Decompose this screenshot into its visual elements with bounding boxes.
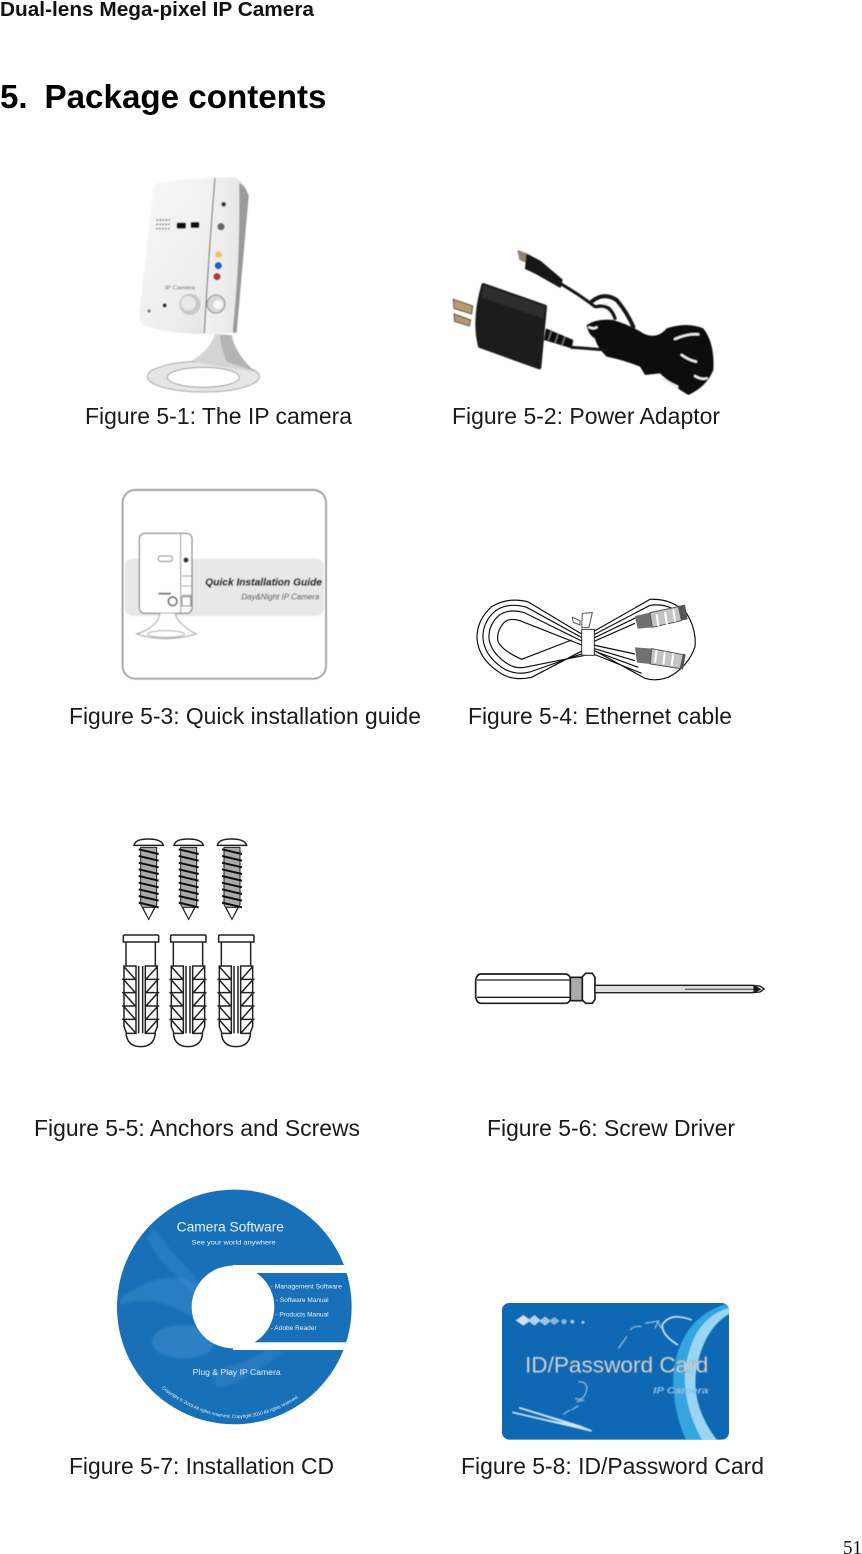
caption: figure 5-5: Figure 5-5: Anchors and Screws [34,1115,360,1141]
section heading: Package contents [44,78,326,115]
caption: figure 5-6: Figure 5-6: Screw Driver [487,1115,735,1141]
section heading: 5. [0,78,28,115]
booklet: quick installation guide: Day&Night IP Camera [241,591,320,601]
installation CD [117,1190,352,1424]
installation CD: - Adobe Reader [271,1325,317,1332]
photo: IP camera [139,177,259,392]
photo: IP camera: IP Camera [165,285,196,291]
booklet: quick installation guide: Quick Installation Guide [205,577,323,588]
installation CD: - Management Software [271,1283,342,1290]
coiled cord [587,320,714,395]
caption: figure 5-8: Figure 5-8: ID/Password Card [461,1453,764,1479]
installation CD: Copyright © 2010 All rights reserved. Copyright 2010 All rights reserved. [162,1386,299,1419]
ID/password card: IP Camera [653,1385,708,1395]
installation CD: Camera Software [177,1220,284,1235]
photo: power adaptor [453,250,714,395]
caption: figure 5-3: Figure 5-3: Quick installation guide [69,703,421,729]
ID/password card: ID/Password Card [525,1352,708,1377]
installation CD: Plug & Play IP Camera [193,1368,281,1377]
installation CD: - Products Manual [275,1311,329,1318]
installation CD: - Software Manual [276,1297,329,1304]
caption: figure 5-4: Figure 5-4: Ethernet cable [468,703,732,729]
ID/password card [502,1303,730,1442]
caption: figure 5-1: Figure 5-1: The IP camera [85,403,353,429]
installation CD: See your world anywhere [192,1239,276,1246]
illustration: anchors and screws [122,839,255,1047]
illustration: ethernet cable [477,599,695,680]
illustration: screw driver [476,973,764,1003]
booklet: quick installation guide [123,490,326,679]
caption: figure 5-2: Figure 5-2: Power Adaptor [452,403,720,429]
caption: figure 5-7: Figure 5-7: Installation CD [69,1453,334,1479]
